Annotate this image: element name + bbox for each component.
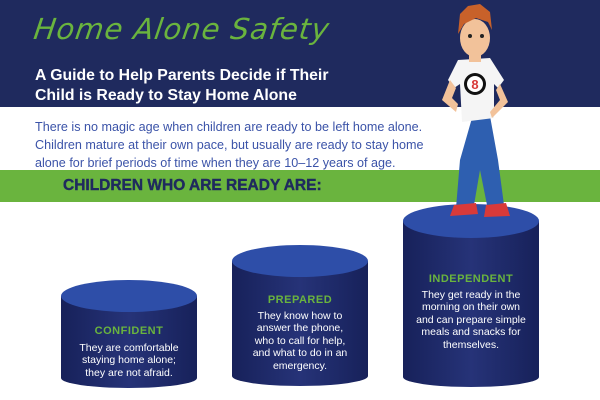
text: confident: they are not afraid.	[85, 367, 173, 379]
character: boy: 8	[471, 77, 479, 92]
text: confident	[79, 325, 179, 379]
text: prepared: PREPARED	[268, 294, 332, 306]
text: independent: themselves.	[443, 339, 499, 351]
text: confident: They are comfortable	[79, 342, 179, 354]
text: independent: meals and snacks for	[421, 326, 521, 338]
text: independent: morning on their own	[422, 301, 520, 313]
character: boy	[442, 4, 510, 217]
text: confident: CONFIDENT	[95, 325, 163, 337]
intro paragraph: There is no magic age when children are ready to be left home alone.	[35, 120, 422, 134]
subtitle	[35, 67, 328, 104]
subtitle: Child is Ready to Stay Home Alone	[35, 87, 297, 104]
cylinder: confident	[61, 280, 197, 388]
text: prepared: emergency.	[273, 360, 327, 372]
text: prepared: who to call for help,	[255, 335, 345, 347]
text: independent: INDEPENDENT	[429, 273, 513, 285]
subtitle: A Guide to Help Parents Decide if Their	[35, 67, 328, 84]
cylinder: independent	[403, 204, 539, 387]
text: independent: They get ready in the	[422, 289, 520, 301]
text: independent	[416, 273, 526, 351]
cylinder: prepared	[232, 245, 368, 386]
text: prepared: answer the phone,	[257, 322, 343, 334]
text: prepared: and what to do in an	[253, 347, 347, 359]
intro paragraph: Children mature at their own pace, but usually are ready to stay home	[35, 138, 424, 152]
header band	[0, 0, 600, 107]
intro paragraph: alone for brief periods of time when they are 10–12 years of age.	[35, 156, 396, 170]
text: independent: and can prepare simple	[416, 314, 526, 326]
text: prepared: They know how to	[258, 310, 342, 322]
text: prepared	[253, 294, 347, 372]
title: Home Alone Safety	[32, 12, 332, 46]
green band heading	[0, 170, 600, 202]
text: confident: staying home alone;	[82, 354, 176, 366]
green band heading: CHILDREN WHO ARE READY ARE:	[63, 177, 322, 194]
intro paragraph	[35, 120, 424, 170]
